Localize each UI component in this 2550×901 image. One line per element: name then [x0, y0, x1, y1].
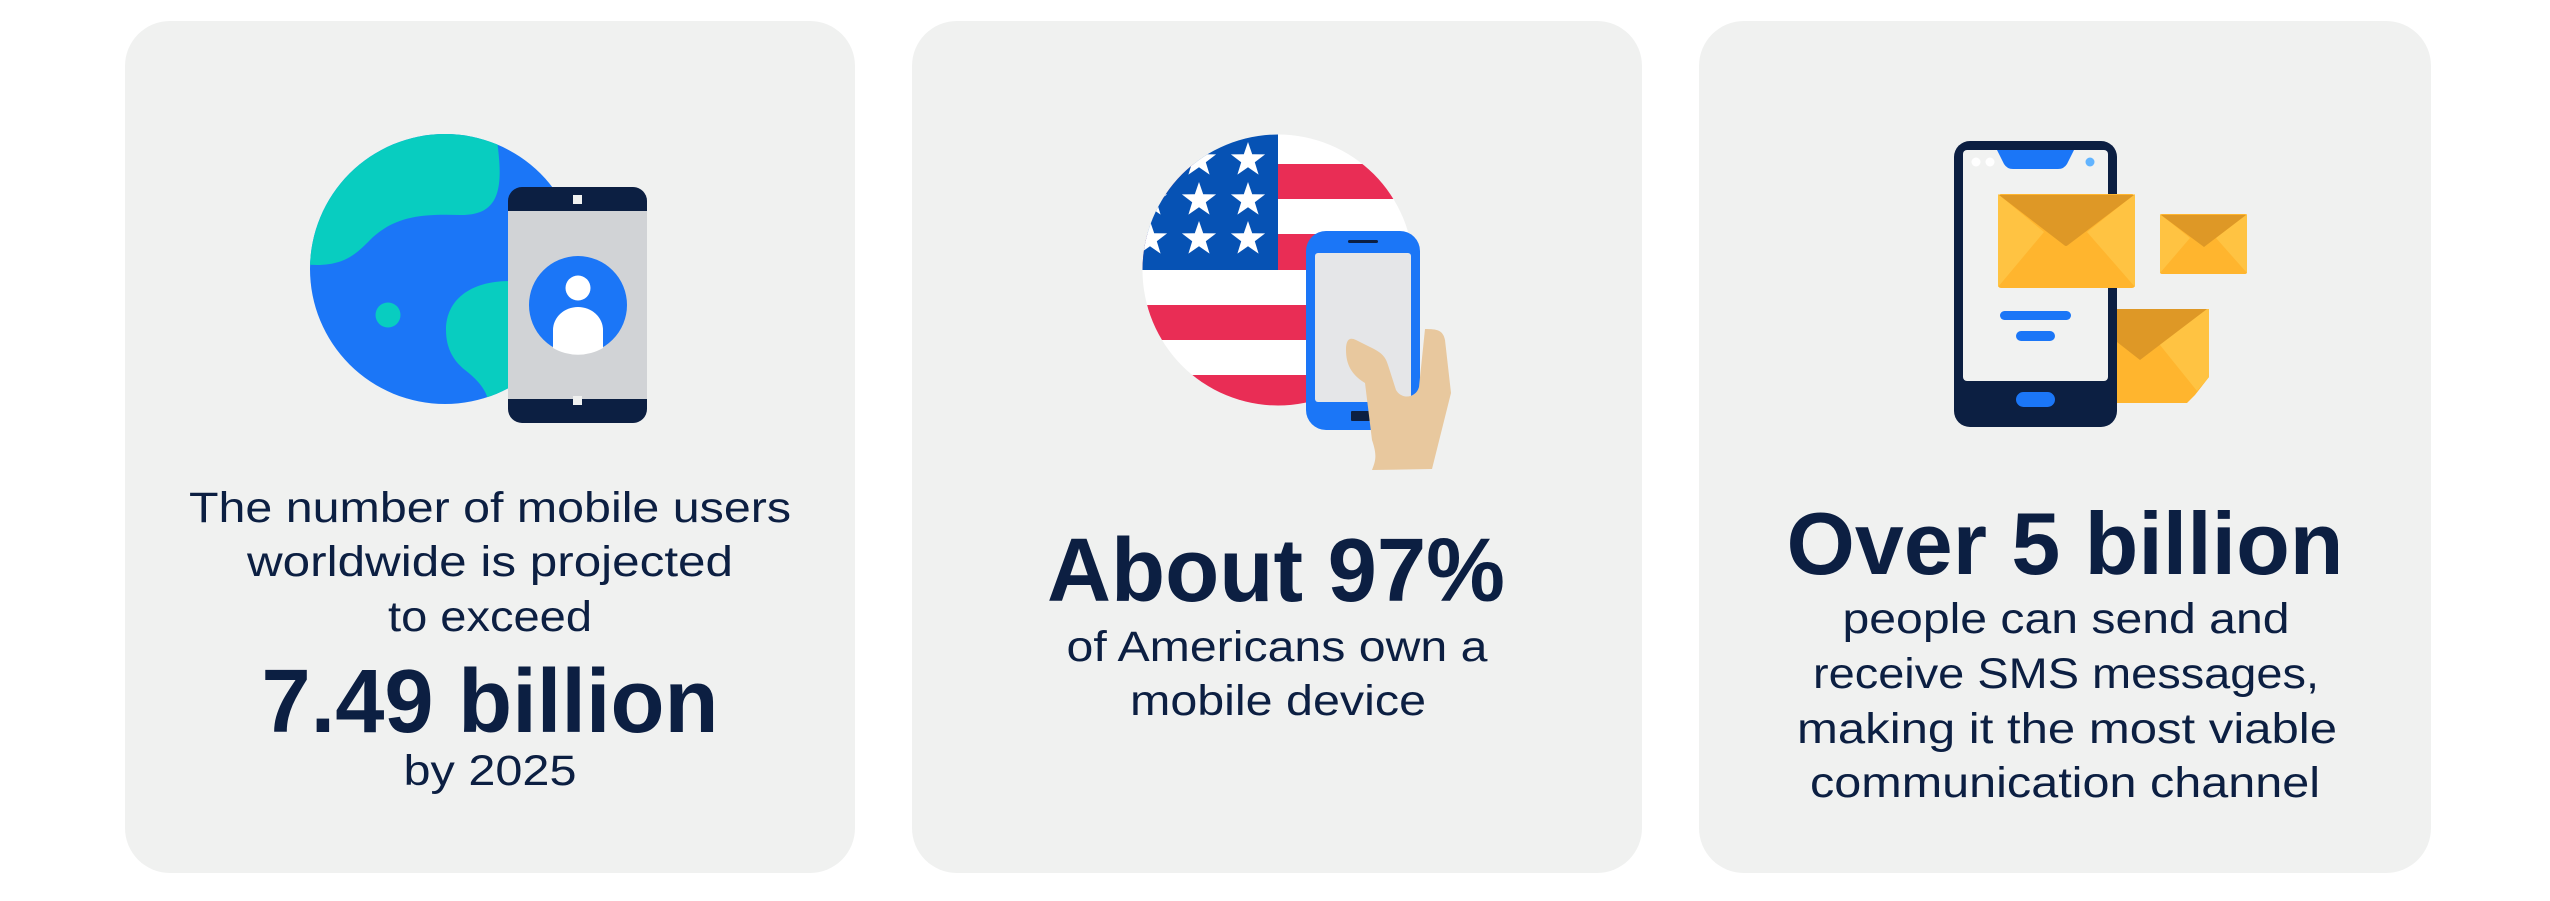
icon: envelope back: [2117, 309, 2209, 403]
icon: globe: [310, 134, 552, 404]
icon: phone with user: [508, 187, 647, 423]
text: americans stat: About 97%: [1047, 521, 1505, 621]
text: SMS stat: communication channel: [1810, 759, 2320, 807]
icon: envelope small: [2160, 214, 2247, 274]
icon: envelope large: [1998, 194, 2135, 288]
text: SMS stat: making it the most viable: [1797, 705, 2337, 753]
text: mobile users description: by 2025: [404, 747, 576, 795]
text: mobile users description: [189, 484, 791, 795]
text: SMS stat: people can send and: [1842, 595, 2290, 643]
text: mobile users description: 7.49 billion: [262, 652, 718, 752]
text: mobile users description: worldwide is projected: [246, 538, 733, 586]
icon: smartphone: [1954, 141, 2117, 427]
text: mobile users description: to exceed: [388, 593, 592, 641]
text: SMS stat: [1786, 494, 2344, 807]
icon: US flag circle: [1142, 134, 1408, 406]
panel: mobile users: [125, 21, 855, 873]
text: mobile users description: The number of mobile users: [189, 484, 791, 532]
text: americans stat: mobile device: [1130, 677, 1426, 725]
panel: SMS: [1699, 21, 2431, 873]
text: SMS stat: receive SMS messages,: [1813, 650, 2319, 698]
text: SMS stat: Over 5 billion: [1786, 494, 2344, 593]
icon: phone in hand: [1306, 231, 1451, 470]
panel: americans: [912, 21, 1642, 873]
text: americans stat: [1047, 521, 1505, 725]
text: americans stat: of Americans own a: [1066, 623, 1488, 671]
